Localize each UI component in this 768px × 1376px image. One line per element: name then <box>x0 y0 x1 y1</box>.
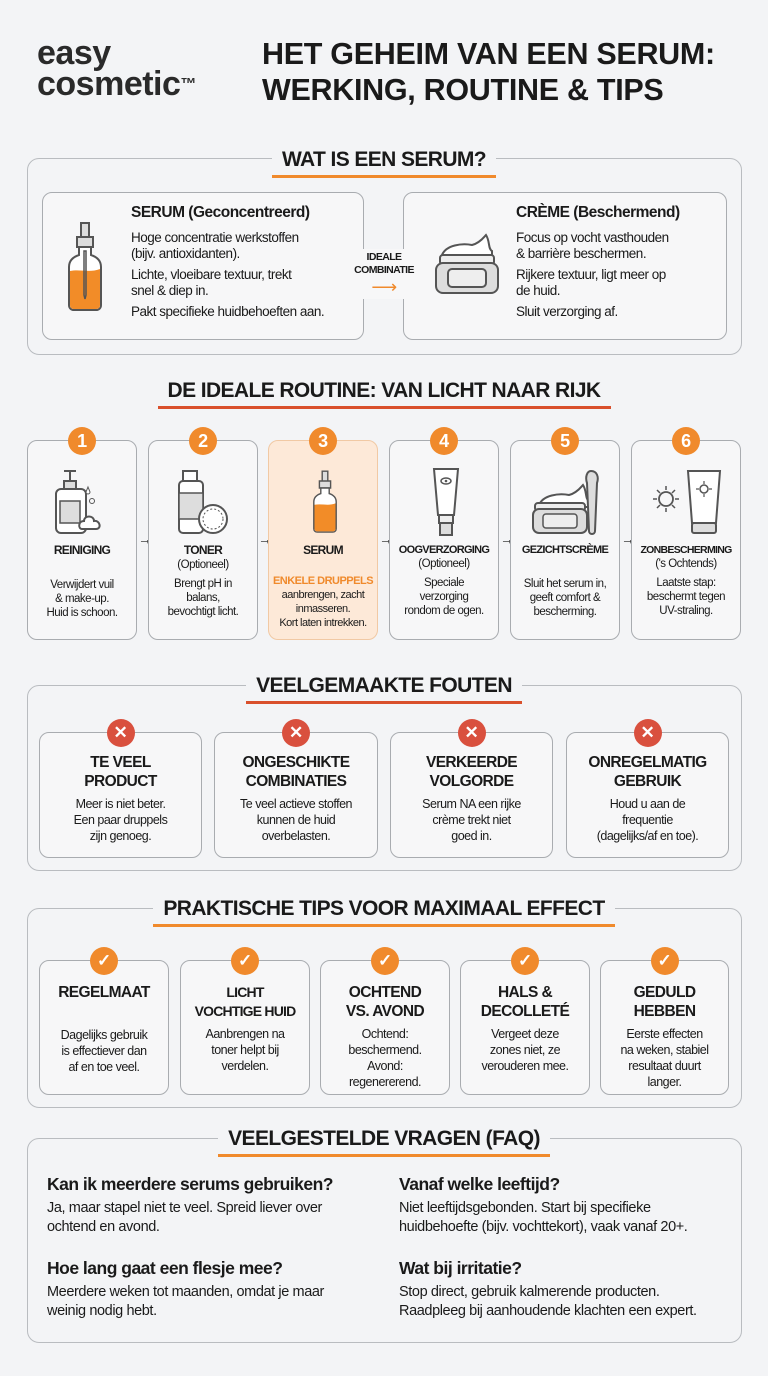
text: creme: CRÈME (Beschermend) <box>516 204 680 221</box>
arrow: → <box>621 531 635 547</box>
step 6: ('s Ochtends) Laatste stap: <box>655 558 717 589</box>
step 5 <box>510 440 620 640</box>
step 1 <box>27 440 137 640</box>
label: ideale combinatie: ⟶ <box>371 277 397 297</box>
step 6: UV-straling. <box>659 605 713 617</box>
tip 4: HALS & <box>498 984 552 1001</box>
text: serum: Hoge concentratie werkstoffen <box>131 230 299 245</box>
tip 1: af en toe veel. <box>68 1060 140 1074</box>
panel: faq <box>27 1138 742 1343</box>
faq 4: Stop direct, gebruik kalmerende producten. <box>399 1284 659 1300</box>
text: creme: & barrière beschermen. <box>516 246 646 261</box>
card: onregelmatig gebruik: Houd u aan de <box>610 797 685 811</box>
title: WERKING, ROUTINE & TIPS <box>262 73 663 107</box>
logo: easy <box>37 34 111 72</box>
text: serum: Lichte, vloeibare textuur, trekt <box>131 267 291 282</box>
panel: veelgemaakte fouten <box>27 685 742 871</box>
faq 4: Raadpleeg bij aanhoudende klachten een expert. <box>399 1303 697 1319</box>
step 6: 6 <box>681 431 691 451</box>
tip 2: Aanbrengen na <box>206 1027 284 1041</box>
panel: praktische tips <box>27 908 742 1108</box>
icon: face cream <box>532 470 599 535</box>
label: ideale combinatie <box>348 249 420 299</box>
card: te veel product: zijn genoeg. <box>90 829 151 843</box>
tip 3: OCHTEND <box>349 984 421 1001</box>
heading: wat is een serum: WAT IS EEN SERUM? <box>282 148 486 171</box>
tip 3: beschermend. <box>348 1043 422 1057</box>
tip 5: HEBBEN <box>634 1003 695 1020</box>
card: serum <box>42 192 364 340</box>
tip 2: verdelen. <box>222 1059 268 1073</box>
step 5: bescherming. <box>533 606 597 618</box>
faq 2: Niet leeftijdsgebonden. Start bij specifieke <box>399 1200 651 1216</box>
tip 1: REGELMAAT <box>58 984 150 1001</box>
card: te veel product <box>39 732 202 858</box>
faq 1 <box>47 1174 333 1235</box>
step 5: 5 <box>560 431 570 451</box>
step 6: ZONBESCHERMING <box>640 544 732 556</box>
tip 1: ✓ <box>97 951 111 970</box>
tip 3: ✓ <box>378 951 392 970</box>
logo: cosmetic™ <box>37 65 196 103</box>
step 1: 1 <box>77 431 87 451</box>
card: ongeschikte combinaties: overbelasten. <box>262 829 330 843</box>
step 3 <box>268 440 378 640</box>
faq 4: Wat bij irritatie? <box>399 1258 522 1278</box>
arrow: → <box>138 531 152 547</box>
text: serum: snel & diep in. <box>131 283 208 298</box>
tip 3: VS. AVOND <box>346 1003 424 1020</box>
arrow: → <box>258 531 272 547</box>
card: verkeerde volgorde: ✕ <box>465 723 478 742</box>
tip 3: Ochtend: <box>362 1027 408 1041</box>
icon: toner <box>178 470 228 534</box>
label: ideale combinatie: COMBINATIE <box>354 264 414 276</box>
card: te veel product: PRODUCT <box>84 773 157 790</box>
card: verkeerde volgorde: VERKEERDE <box>426 754 517 771</box>
faq 2 <box>399 1174 687 1235</box>
tip 2: ✓ <box>238 951 252 970</box>
tip 2: toner helpt bij <box>211 1043 279 1057</box>
card: onregelmatig gebruik: ✕ <box>641 723 654 742</box>
text: creme: de huid. <box>516 283 560 298</box>
tip 4: DECOLLETÉ <box>481 1003 569 1020</box>
tip 1 <box>39 960 169 1095</box>
step 6: beschermt tegen <box>647 591 725 603</box>
card: onregelmatig gebruik <box>566 732 729 858</box>
step 4: (Optioneel) Speciale <box>418 558 470 589</box>
card: ongeschikte combinaties: COMBINATIES <box>246 773 346 790</box>
faq 1: ochtend en avond. <box>47 1219 160 1235</box>
step 2: TONER <box>184 543 222 557</box>
step 4: rondom de ogen. <box>404 605 484 617</box>
panel: wat is een serum <box>27 158 742 355</box>
tip 2 <box>180 960 310 1095</box>
step 1: Huid is schoon. <box>46 607 118 619</box>
tip 4 <box>460 960 590 1095</box>
text: creme: Sluit verzorging af. <box>516 304 618 319</box>
faq 1: Kan ik meerdere serums gebruiken? <box>47 1174 333 1194</box>
step 4: verzorging <box>420 591 468 603</box>
text: serum: (bijv. antioxidanten). <box>131 246 240 261</box>
card: ongeschikte combinaties: kunnen de huid <box>257 813 335 827</box>
step 2: 2 <box>198 431 208 451</box>
step 3: 3 <box>318 431 328 451</box>
tip 5: langer. <box>647 1075 682 1089</box>
tip 4: verouderen mee. <box>481 1059 568 1073</box>
card: te veel product: Meer is niet beter. <box>76 797 165 811</box>
faq 1: Ja, maar stapel niet te veel. Spreid liever over <box>47 1200 322 1216</box>
tip 4: Vergeet deze <box>491 1027 559 1041</box>
faq 2: Vanaf welke leeftijd? <box>399 1174 560 1194</box>
tip 5: na weken, stabiel <box>620 1043 709 1057</box>
icon: serum bottle <box>68 222 102 311</box>
step 3: Kort laten intrekken. <box>279 617 367 629</box>
card: te veel product: ✕ <box>114 723 127 742</box>
text: serum: Pakt specifieke huidbehoeften aan. <box>131 304 324 319</box>
card: ongeschikte combinaties: ONGESCHIKTE <box>242 754 350 771</box>
step 4 <box>389 440 499 640</box>
step 6 <box>631 440 741 640</box>
text: serum <box>131 204 324 319</box>
step 3: aanbrengen, zacht <box>282 589 364 601</box>
tip 1: is effectiever dan <box>61 1044 147 1058</box>
step 1: REINIGING Verwijdert vuil <box>50 543 114 591</box>
card: ongeschikte combinaties <box>214 732 378 858</box>
step 2: balans, <box>186 592 220 604</box>
tip 5 <box>600 960 729 1095</box>
faq 3: Meerdere weken tot maanden, omdat je maar <box>47 1284 324 1300</box>
card: creme <box>403 192 727 340</box>
icon: eye tube <box>432 468 460 536</box>
text: serum: SERUM (Geconcentreerd) <box>131 204 309 221</box>
card: ongeschikte combinaties: ✕ <box>289 723 303 742</box>
tip 5: GEDULD <box>634 984 695 1001</box>
arrow: → <box>500 531 514 547</box>
tip 2: LICHT <box>226 984 264 1000</box>
tip 2: VOCHTIGE HUID <box>195 1003 295 1019</box>
card: te veel product: Een paar druppels <box>74 813 167 827</box>
icon: creme jar <box>435 234 499 294</box>
label: ideale combinatie: IDEALE <box>367 251 401 263</box>
tip 3 <box>320 960 450 1095</box>
heading: tips: PRAKTISCHE TIPS VOOR MAXIMAAL EFFECT <box>163 897 605 920</box>
faq 3: Hoe lang gaat een flesje mee? <box>47 1258 282 1278</box>
icon: cleanser <box>55 470 101 534</box>
tip 5: resultaat duurt <box>628 1059 701 1073</box>
tip 1: Dagelijks gebruik <box>61 1028 147 1042</box>
step 2 <box>148 440 258 640</box>
step 2: bevochtigt licht. <box>168 606 238 618</box>
heading: ideale routine: DE IDEALE ROUTINE: VAN LICHT NAAR RIJK <box>168 379 600 402</box>
step 5: geeft comfort & <box>530 592 600 604</box>
text: creme <box>516 203 680 319</box>
card: onregelmatig gebruik: frequentie <box>622 813 673 827</box>
tip 3: regenererend. <box>349 1075 421 1089</box>
text: creme: Focus op vocht vasthouden <box>516 230 669 245</box>
icon: sunscreen <box>653 470 722 534</box>
title <box>262 37 715 107</box>
heading: fouten: VEELGEMAAKTE FOUTEN <box>256 674 512 697</box>
arrow: → <box>379 531 393 547</box>
step 1: & make-up. <box>55 593 109 605</box>
faq 4 <box>399 1258 697 1319</box>
card: verkeerde volgorde: Serum NA een rijke <box>422 797 521 811</box>
step 3: inmasseren. <box>296 603 350 615</box>
tip 4: ✓ <box>518 951 532 970</box>
faq 2: huidbehoefte (bijv. vochttekort), vaak vanaf 20+. <box>399 1219 687 1235</box>
heading: faq: VEELGESTELDE VRAGEN (FAQ) <box>228 1127 540 1150</box>
card: verkeerde volgorde <box>390 732 553 858</box>
title: HET GEHEIM VAN EEN SERUM: <box>262 37 715 71</box>
icon: serum <box>313 470 337 533</box>
step 3: SERUM ENKELE DRUPPELS <box>273 543 373 587</box>
card: onregelmatig gebruik: ONREGELMATIG <box>588 754 707 771</box>
text: creme: Rijkere textuur, ligt meer op <box>516 267 666 282</box>
step 2: (Optioneel) Brengt pH in <box>174 559 232 590</box>
card: onregelmatig gebruik: GEBRUIK <box>614 773 681 790</box>
card: verkeerde volgorde: crème trekt niet <box>432 813 511 827</box>
card: verkeerde volgorde: VOLGORDE <box>430 773 513 790</box>
card: onregelmatig gebruik: (dagelijks/af en toe). <box>597 829 698 843</box>
card: te veel product: TE VEEL <box>90 754 151 771</box>
card: ongeschikte combinaties: Te veel actieve stoffen <box>240 797 352 811</box>
tip 5: ✓ <box>658 951 671 970</box>
tip 3: Avond: <box>367 1059 403 1073</box>
step 5: GEZICHTSCRÈME Sluit het serum in, <box>522 544 608 590</box>
tip 5: Eerste effecten <box>626 1027 703 1041</box>
faq 3 <box>47 1258 324 1319</box>
card: verkeerde volgorde: goed in. <box>451 829 492 843</box>
tip 4: zones niet, ze <box>490 1043 560 1057</box>
faq 3: weinig nodig hebt. <box>47 1303 157 1319</box>
logo <box>37 34 196 103</box>
step 4: OOGVERZORGING <box>399 544 489 556</box>
step 4: 4 <box>439 431 449 451</box>
